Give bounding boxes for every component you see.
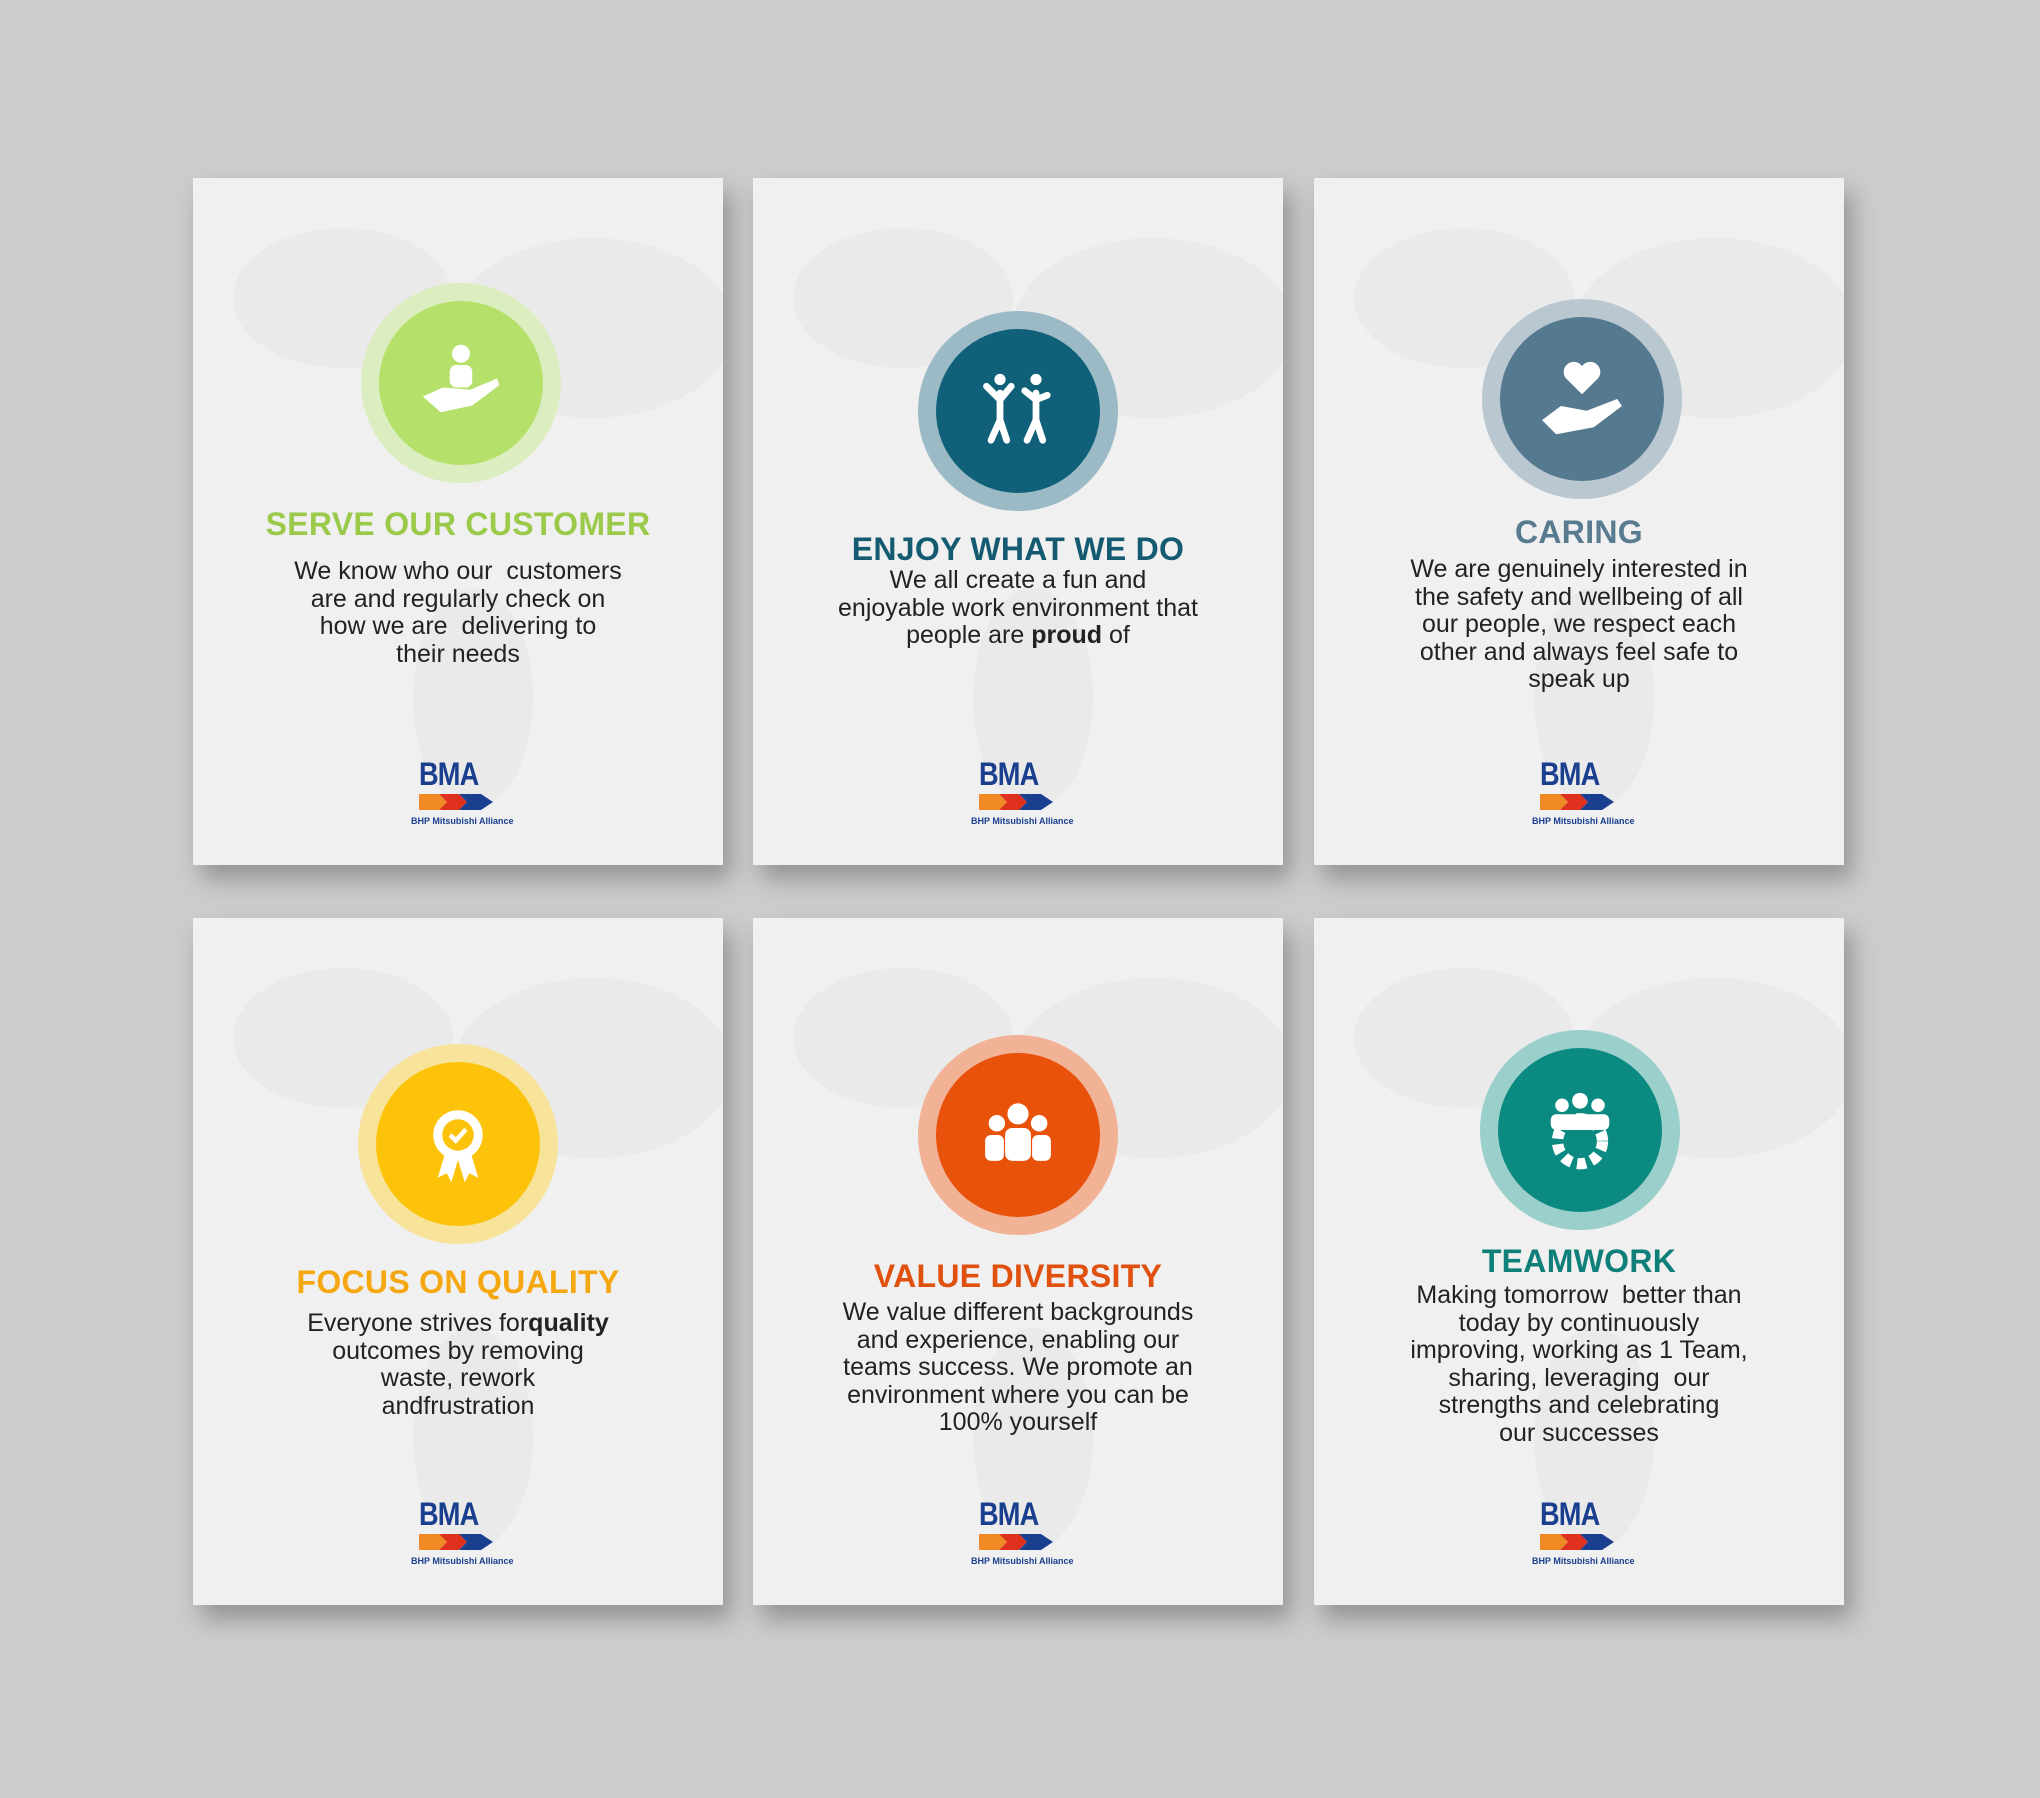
logo <box>971 1496 1074 1566</box>
title: SERVE OUR CUSTOMER <box>266 506 650 542</box>
logo: BHP Mitsubishi Alliance <box>411 816 514 826</box>
body text: their needs <box>396 640 520 668</box>
body text: how we are delivering to <box>320 612 596 640</box>
body text <box>294 557 622 668</box>
body text: Everyone strives forquality <box>307 1309 609 1337</box>
icon: dancing people <box>918 311 1118 511</box>
logo: BMA <box>1540 756 1599 792</box>
logo <box>411 756 514 826</box>
body text: teams success. We promote an <box>843 1353 1193 1381</box>
body text: Making tomorrow better than <box>1416 1281 1742 1309</box>
icon: quality badge <box>358 1044 558 1244</box>
icon: hand with person <box>361 283 561 483</box>
body text: people are proud of <box>906 621 1130 649</box>
logo: BHP Mitsubishi Alliance <box>971 1556 1074 1566</box>
body text <box>1410 555 1748 693</box>
body text: We are genuinely interested in <box>1410 555 1748 583</box>
body text: speak up <box>1528 665 1630 693</box>
logo: BMA <box>979 1496 1038 1532</box>
logo: BHP Mitsubishi Alliance <box>411 1556 514 1566</box>
logo <box>1532 1496 1635 1566</box>
title: VALUE DIVERSITY <box>874 1258 1162 1294</box>
body text: We know who our customers <box>294 557 622 585</box>
body text: outcomes by removing <box>332 1336 584 1364</box>
logo: BMA <box>1540 1496 1599 1532</box>
card: caring <box>1314 178 1844 865</box>
body text <box>1410 1281 1748 1446</box>
logo: BMA <box>979 756 1038 792</box>
card: enjoy what we do <box>753 178 1283 865</box>
body text: strengths and celebrating <box>1439 1391 1719 1419</box>
card: value diversity <box>753 918 1283 1605</box>
card: focus on quality <box>193 918 723 1605</box>
icon: team gear <box>1480 1030 1680 1230</box>
title: FOCUS ON QUALITY <box>296 1264 620 1300</box>
icon: group of people <box>918 1035 1118 1235</box>
body text: 100% yourself <box>939 1408 1097 1436</box>
body text: other and always feel safe to <box>1420 638 1738 666</box>
body text: the safety and wellbeing of all <box>1415 582 1743 610</box>
logo <box>411 1496 514 1566</box>
body text: today by continuously <box>1459 1308 1699 1336</box>
logo: BMA <box>419 1496 478 1532</box>
body text <box>307 1309 609 1420</box>
body text: are and regularly check on <box>311 584 605 612</box>
body text <box>838 566 1198 649</box>
logo: BHP Mitsubishi Alliance <box>1532 1556 1635 1566</box>
logo: BHP Mitsubishi Alliance <box>1532 816 1635 826</box>
logo: BHP Mitsubishi Alliance <box>971 816 1074 826</box>
card: teamwork <box>1314 918 1844 1605</box>
logo <box>1532 756 1635 826</box>
title: TEAMWORK <box>1482 1243 1676 1279</box>
body text: and experience, enabling our <box>857 1326 1179 1354</box>
title: ENJOY WHAT WE DO <box>852 531 1184 567</box>
card: serve our customer <box>193 178 723 865</box>
body text: sharing, leveraging our <box>1448 1364 1710 1392</box>
logo <box>971 756 1074 826</box>
title: CARING <box>1515 514 1643 550</box>
body text: We all create a fun and <box>890 566 1146 594</box>
icon: heart in hand <box>1482 299 1682 499</box>
body text: andfrustration <box>382 1392 534 1420</box>
body text: waste, rework <box>381 1364 535 1392</box>
body text: environment where you can be <box>847 1380 1189 1408</box>
body text: our successes <box>1499 1418 1659 1446</box>
body text: We value different backgrounds <box>843 1298 1193 1326</box>
logo: BMA <box>419 756 478 792</box>
body text: improving, working as 1 Team, <box>1410 1336 1748 1364</box>
body text: enjoyable work environment that <box>838 594 1198 622</box>
body text: our people, we respect each <box>1422 610 1736 638</box>
body text <box>842 1298 1193 1436</box>
